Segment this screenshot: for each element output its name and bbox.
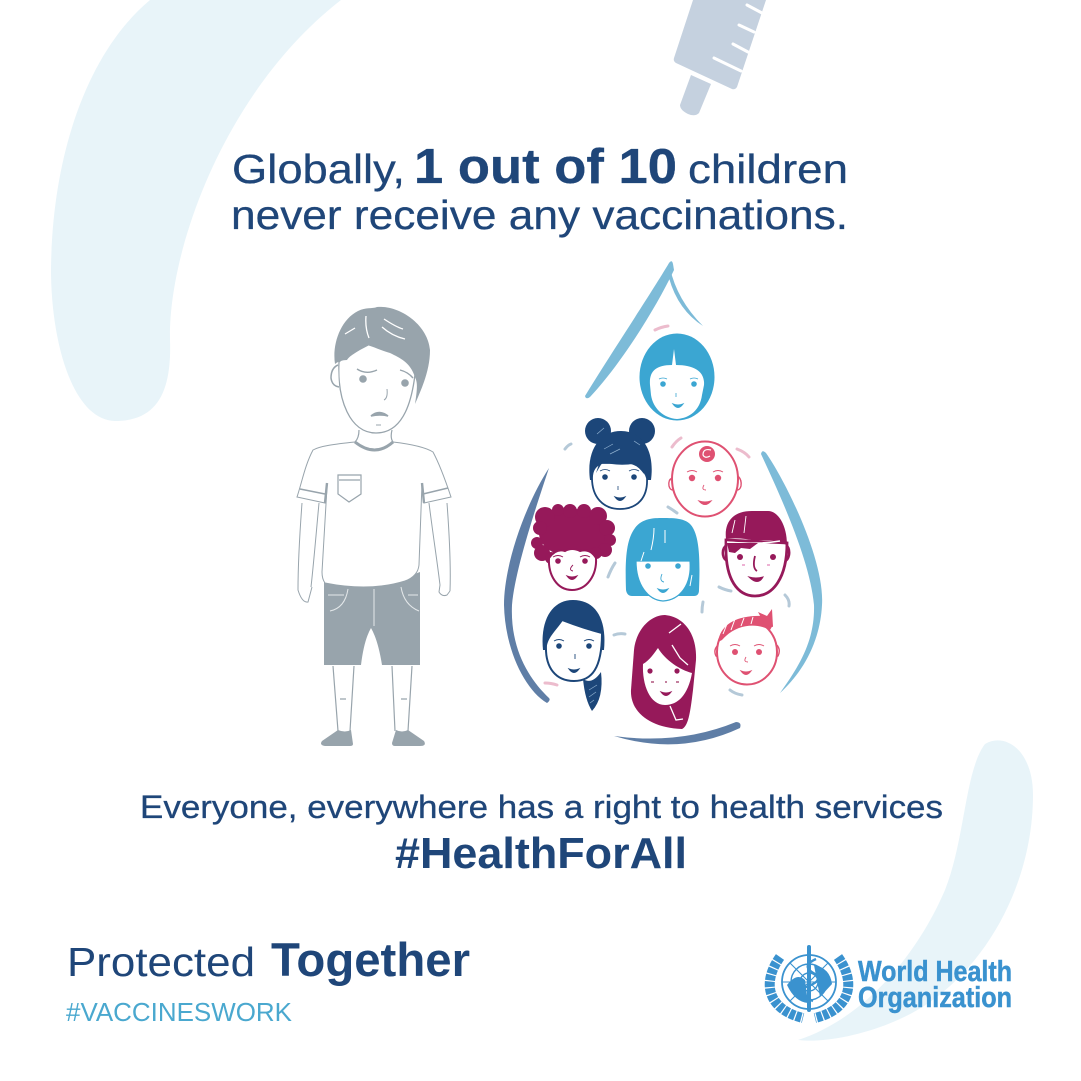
illustration: sad unvaccinated boy [297,307,451,746]
drop outline: top right [669,268,703,326]
illustration: water drop of children [504,261,822,744]
title: children [688,146,848,192]
boy: sleeve cuffs and shirt folds [300,488,448,494]
child face 9: pink hair with bow [715,609,779,684]
boy: hair highlights [345,316,405,339]
campaign name: Protected [67,939,255,985]
boy: eyes [359,375,409,387]
child face 4: afro [531,504,616,590]
hashtag: #HealthForAll [395,829,687,878]
drop outline: bottom [614,722,740,744]
boy: shirt pocket [338,475,361,502]
message: Everyone, everywhere has a right to health services [140,789,943,825]
child face 8: long magenta hair [631,615,696,729]
confetti marks: blue and grey [565,444,789,695]
boy: shorts [324,572,420,665]
child face 5: blue bob [626,518,699,601]
background blob: bottom right [798,740,1033,1041]
child face 2: navy hair with buns [585,418,655,509]
boy: chin mark [376,424,381,426]
background blob: top left [51,0,341,421]
logo: World Health Organization wordmark: World Health [858,956,1012,988]
boy: legs and socks [333,666,412,731]
boy: right shoe [392,730,425,746]
drop outline: top left [585,261,674,398]
campaign name [67,933,470,986]
boy: hair [334,307,430,404]
campaign name: Together [271,933,470,986]
confetti marks: pink [545,326,749,685]
logo: World Health Organization wordmark [858,956,1012,1014]
drop outline: right [761,451,822,693]
logo: World Health Organization wordmark: Organization [858,982,1012,1014]
boy: shorts details [328,587,419,626]
boy: t-shirt [297,442,451,587]
boy: eyebrows [357,369,413,378]
campaign hashtag: #VACCINESWORK [66,997,293,1027]
boy: neck [355,430,393,442]
boy: nose [384,389,387,400]
logo: WHO emblem [770,947,848,1018]
boy: mouth [371,412,388,416]
child face 3: pink baby [669,442,741,516]
title [231,140,848,238]
child face 7: navy braid [543,600,604,711]
child face 6: boy with cap [723,511,789,596]
icon: syringe [674,0,766,115]
boy: left shoe [321,730,353,746]
title: never receive any vaccinations. [231,192,848,238]
child face 1: blue hair [640,334,714,420]
boy: collar [355,442,393,450]
boy: ear [331,365,339,387]
boy: face [339,339,416,433]
boy: arms [298,503,450,602]
drop outline: left [504,468,550,703]
title: Globally, [232,146,405,192]
title: 1 out of 10 [414,140,677,194]
